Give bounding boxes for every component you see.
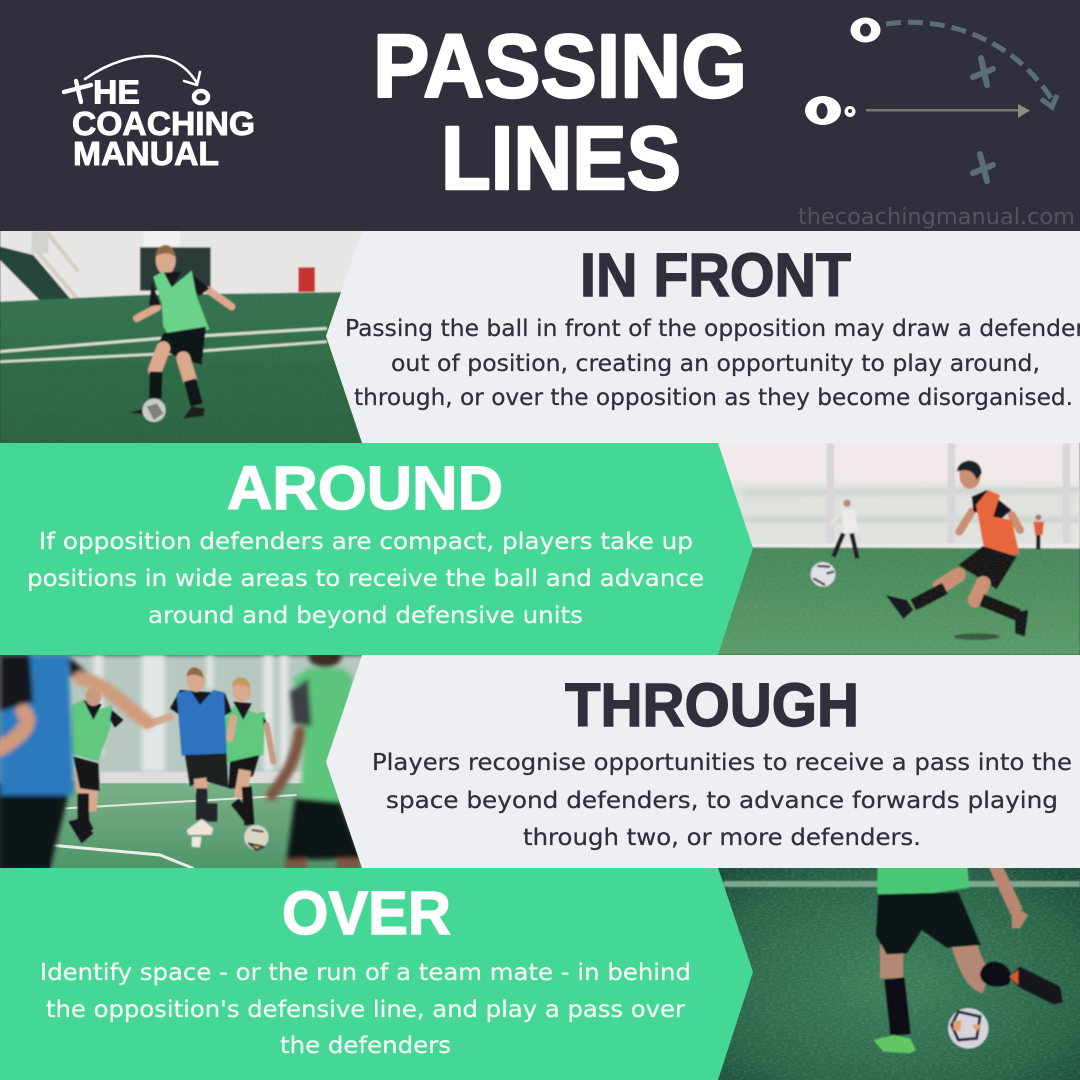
legs: [155, 348, 190, 380]
logo arrow arc: [85, 56, 200, 85]
panel: over: [0, 868, 753, 1080]
distant figure white: [830, 514, 840, 526]
run arrowhead: [1041, 95, 1057, 107]
photo: player in orange bib kicking: [710, 440, 1080, 655]
pass arrow: [866, 104, 1030, 118]
head: [154, 252, 177, 274]
logo wordmark: [72, 74, 255, 172]
body text: space beyond defenders, to advance forwards playing: [386, 788, 1058, 814]
panel: in front: [326, 231, 1080, 443]
legs: [940, 575, 983, 600]
body text: Players recognise opportunities to receive a pass into the: [372, 750, 1072, 776]
arm: [995, 865, 1017, 912]
photo: close-up of striking the ball: [710, 865, 1080, 1080]
body text: [372, 750, 1072, 851]
shorts: [157, 327, 206, 365]
ball: [142, 399, 166, 422]
body text: Identify space - or the run of a team mate - in behind: [40, 960, 691, 986]
panel: around: [0, 443, 753, 655]
panel: through: [326, 655, 1080, 868]
photo: group of players in bibs: [0, 646, 370, 870]
body text: If opposition defenders are compact, players take up: [39, 529, 693, 555]
body text: Passing the ball in front of the opposition may draw a defender: [345, 316, 1080, 342]
defender cross bottom: [973, 154, 993, 181]
green shirt: [877, 865, 969, 900]
dashed curved run: [886, 22, 1051, 98]
ball: [844, 106, 856, 117]
arms: [137, 290, 232, 318]
panel shape: [326, 231, 1080, 443]
panel shape: [0, 868, 753, 1080]
shorts: [876, 892, 981, 954]
body text: positions in wide areas to receive the ball and advance: [27, 566, 704, 592]
black shirt: [972, 490, 1012, 520]
title: LINES: [441, 109, 681, 209]
ball: [244, 825, 269, 850]
logo circle mark: [194, 91, 208, 103]
tactic diagram icon: [805, 18, 1057, 181]
body text: the defenders: [280, 1033, 451, 1059]
heading: IN FRONT: [580, 241, 851, 309]
distant figure orange: [1033, 522, 1044, 535]
defender cross top: [973, 58, 993, 85]
attacker top: [850, 18, 880, 42]
foreground blurred blue player: [0, 655, 74, 798]
heading: THROUGH: [565, 671, 859, 739]
title: [373, 17, 747, 209]
body text: around and beyond defensive units: [148, 603, 583, 629]
sleeves: [149, 273, 209, 306]
socks: [894, 978, 901, 1035]
panel shape: [0, 443, 753, 655]
logo wordmark: MANUAL: [73, 135, 219, 172]
logo wordmark: HE: [93, 74, 140, 110]
attacker with ball: [805, 96, 841, 125]
shorts: [958, 546, 1017, 589]
body text: [345, 316, 1080, 411]
left green bib player: [71, 700, 113, 762]
body text: through, or over the opposition as they become disorganised.: [354, 385, 1073, 411]
body text: the opposition's defensive line, and play a pass over: [46, 997, 686, 1023]
raised boot: [1009, 967, 1063, 1004]
bib: [153, 271, 209, 337]
planted boot: [873, 1035, 916, 1053]
heading: AROUND: [227, 454, 503, 522]
photo: player in green bib passing: [0, 230, 370, 445]
title: PASSING: [373, 17, 747, 117]
body text: out of position, creating an opportunity to play around,: [391, 351, 1040, 377]
head: [958, 468, 982, 490]
logo wordmark: COACHING: [72, 105, 255, 142]
body text: through two, or more defenders.: [523, 825, 921, 851]
foreground blurred green player: [293, 668, 353, 802]
body text: [40, 960, 691, 1059]
orange bib: [976, 490, 1019, 557]
logo cross mark: [64, 81, 91, 102]
website url: thecoachingmanual.com: [798, 205, 1075, 230]
centre blue bib player: [170, 690, 232, 718]
ball: [811, 562, 835, 587]
body text: [27, 529, 704, 629]
back green bib player: [224, 705, 265, 763]
logo: The Coaching Manual: [64, 56, 255, 172]
kicker arm: [959, 512, 1020, 532]
header band: [0, 0, 1080, 231]
ball: [948, 1008, 989, 1049]
panel shape: [326, 655, 1080, 868]
thighs: [857, 945, 927, 978]
heading: OVER: [282, 879, 451, 947]
